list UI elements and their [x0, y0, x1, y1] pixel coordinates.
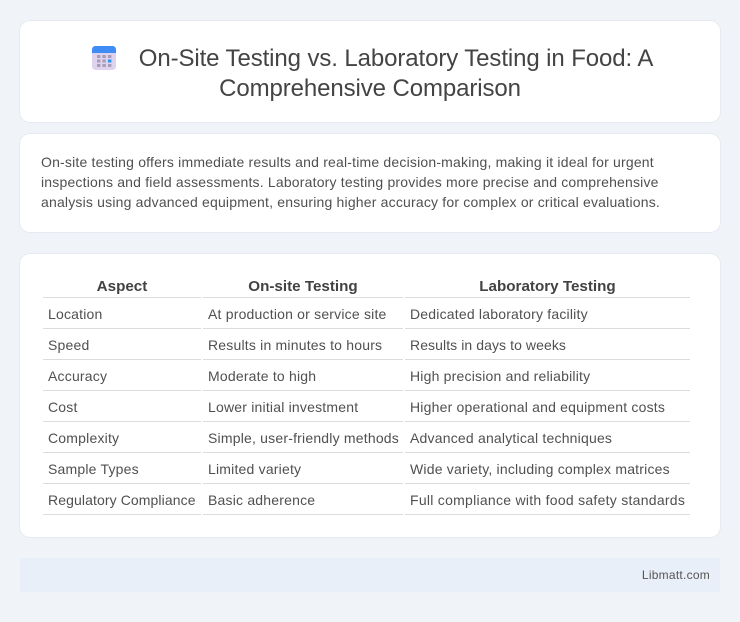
row: regulatory compliance [43, 492, 690, 515]
row: speed [43, 337, 690, 360]
table header [43, 278, 690, 298]
row: location: At production or service site [208, 306, 387, 322]
row: location: Dedicated laboratory facility [410, 306, 588, 322]
summary text [41, 154, 660, 210]
summary text: On-site testing offers immediate results and real-time decision-making, making it ideal for urgent [41, 154, 654, 170]
row: accuracy: Moderate to high [208, 368, 316, 384]
row: accuracy [43, 368, 690, 391]
row: cost [43, 399, 690, 422]
row: speed: Speed [48, 337, 89, 353]
panel: comparison table [20, 254, 720, 537]
row: regulatory compliance: Regulatory Compliance [48, 492, 196, 508]
row: speed: Results in days to weeks [410, 337, 566, 353]
row: cost: Higher operational and equipment costs [410, 399, 665, 415]
row: sample types: Limited variety [208, 461, 301, 477]
row: speed: Results in minutes to hours [208, 337, 382, 353]
table header: Laboratory Testing [479, 278, 616, 295]
row: regulatory compliance: Basic adherence [208, 492, 315, 508]
row: cost: Cost [48, 399, 78, 415]
row: complexity: Simple, user-friendly methods [208, 430, 399, 446]
title: Comprehensive Comparison [219, 74, 521, 102]
table header: Aspect [97, 278, 147, 295]
row: location [43, 306, 690, 329]
footer bar [20, 558, 720, 592]
row: sample types [43, 461, 690, 484]
footer text: Libmatt.com [642, 568, 710, 582]
row: accuracy: High precision and reliability [410, 368, 590, 384]
summary text: inspections and field assessments. Laboratory testing provides more precise and comprehensive [41, 174, 659, 190]
title: On-Site Testing vs. Laboratory Testing in Food: A [139, 45, 653, 72]
row: complexity: Complexity [48, 430, 119, 446]
icon: calendar [92, 46, 116, 70]
row: complexity: Advanced analytical techniques [410, 430, 612, 446]
row: regulatory compliance: Full compliance with food safety standards [410, 492, 685, 508]
row: sample types: Sample Types [48, 461, 139, 477]
panel: title header [20, 21, 720, 122]
panel: summary [20, 134, 720, 232]
row: complexity [43, 430, 690, 453]
summary text: analysis using advanced equipment, ensuring higher accuracy for complex or critical evaluations. [41, 194, 660, 210]
row: cost: Lower initial investment [208, 399, 358, 415]
row: accuracy: Accuracy [48, 368, 107, 384]
row: location: Location [48, 306, 103, 322]
row: sample types: Wide variety, including complex matrices [410, 461, 670, 477]
table header: On-site Testing [248, 278, 358, 295]
title [139, 45, 654, 102]
